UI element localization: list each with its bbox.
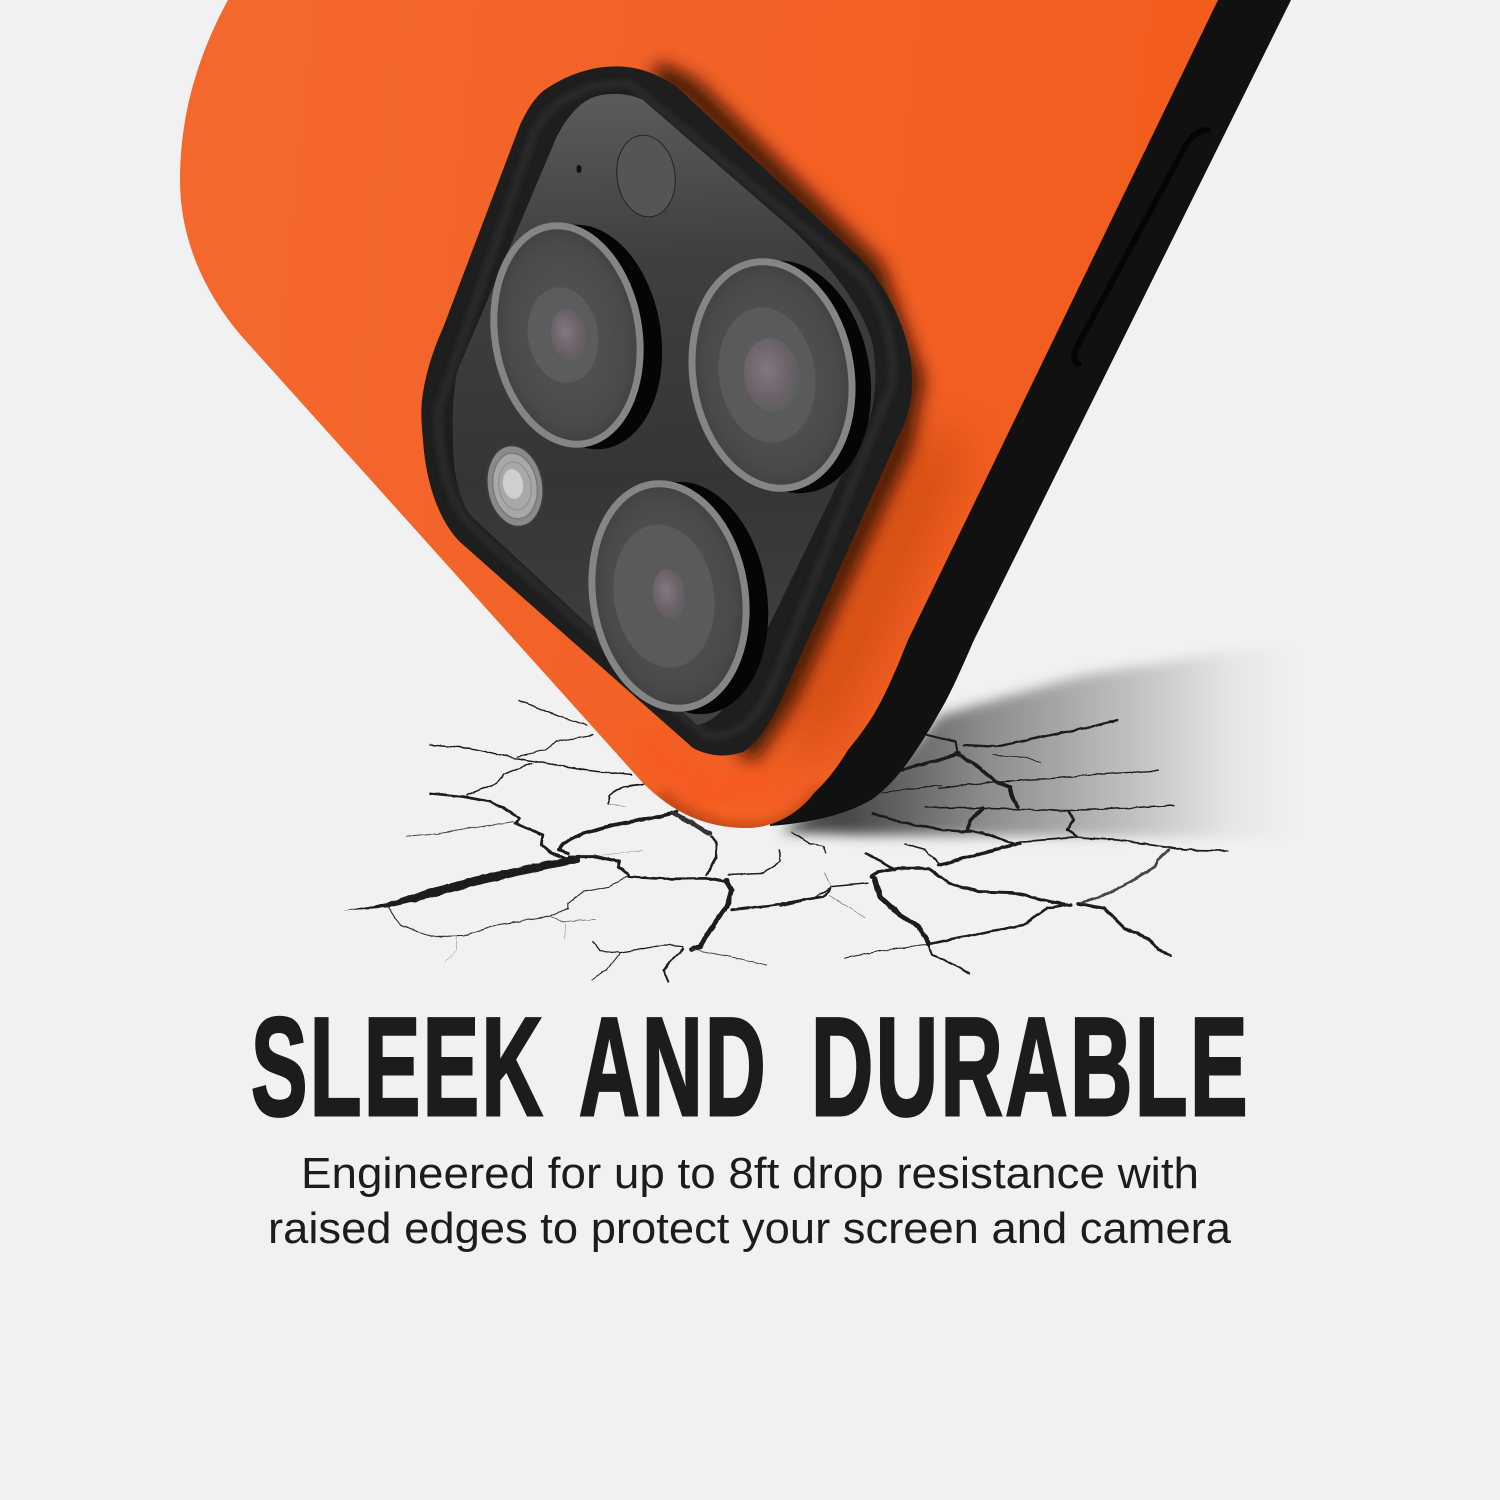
flash [481,441,549,531]
camera module [421,66,912,755]
title: AND [579,988,768,1145]
cast shadow [780,645,1305,838]
ground cracks: right [780,720,1228,973]
case black side edge [770,0,1291,826]
subtitle: Engineered for up to 8ft drop resistance with [301,1149,1199,1198]
subtitle: raised edges to protect your screen and camera [268,1204,1232,1253]
lens 3 [576,470,784,726]
lens 1 [479,214,678,460]
case orange back [180,0,1218,832]
side button [1074,130,1208,364]
phone case [180,0,1291,832]
title: SLEEK [251,988,545,1145]
subtitle [268,1149,1232,1253]
camera rim highlight [438,84,893,736]
ground cracks: left [343,700,830,982]
lens 2 [676,249,887,505]
microphone dot [576,165,582,173]
infographic canvas [180,0,1291,1252]
LiDAR sensor [612,131,680,221]
title [251,988,1250,1145]
camera glass plate [453,94,875,725]
camera bump outer rim [421,66,912,755]
